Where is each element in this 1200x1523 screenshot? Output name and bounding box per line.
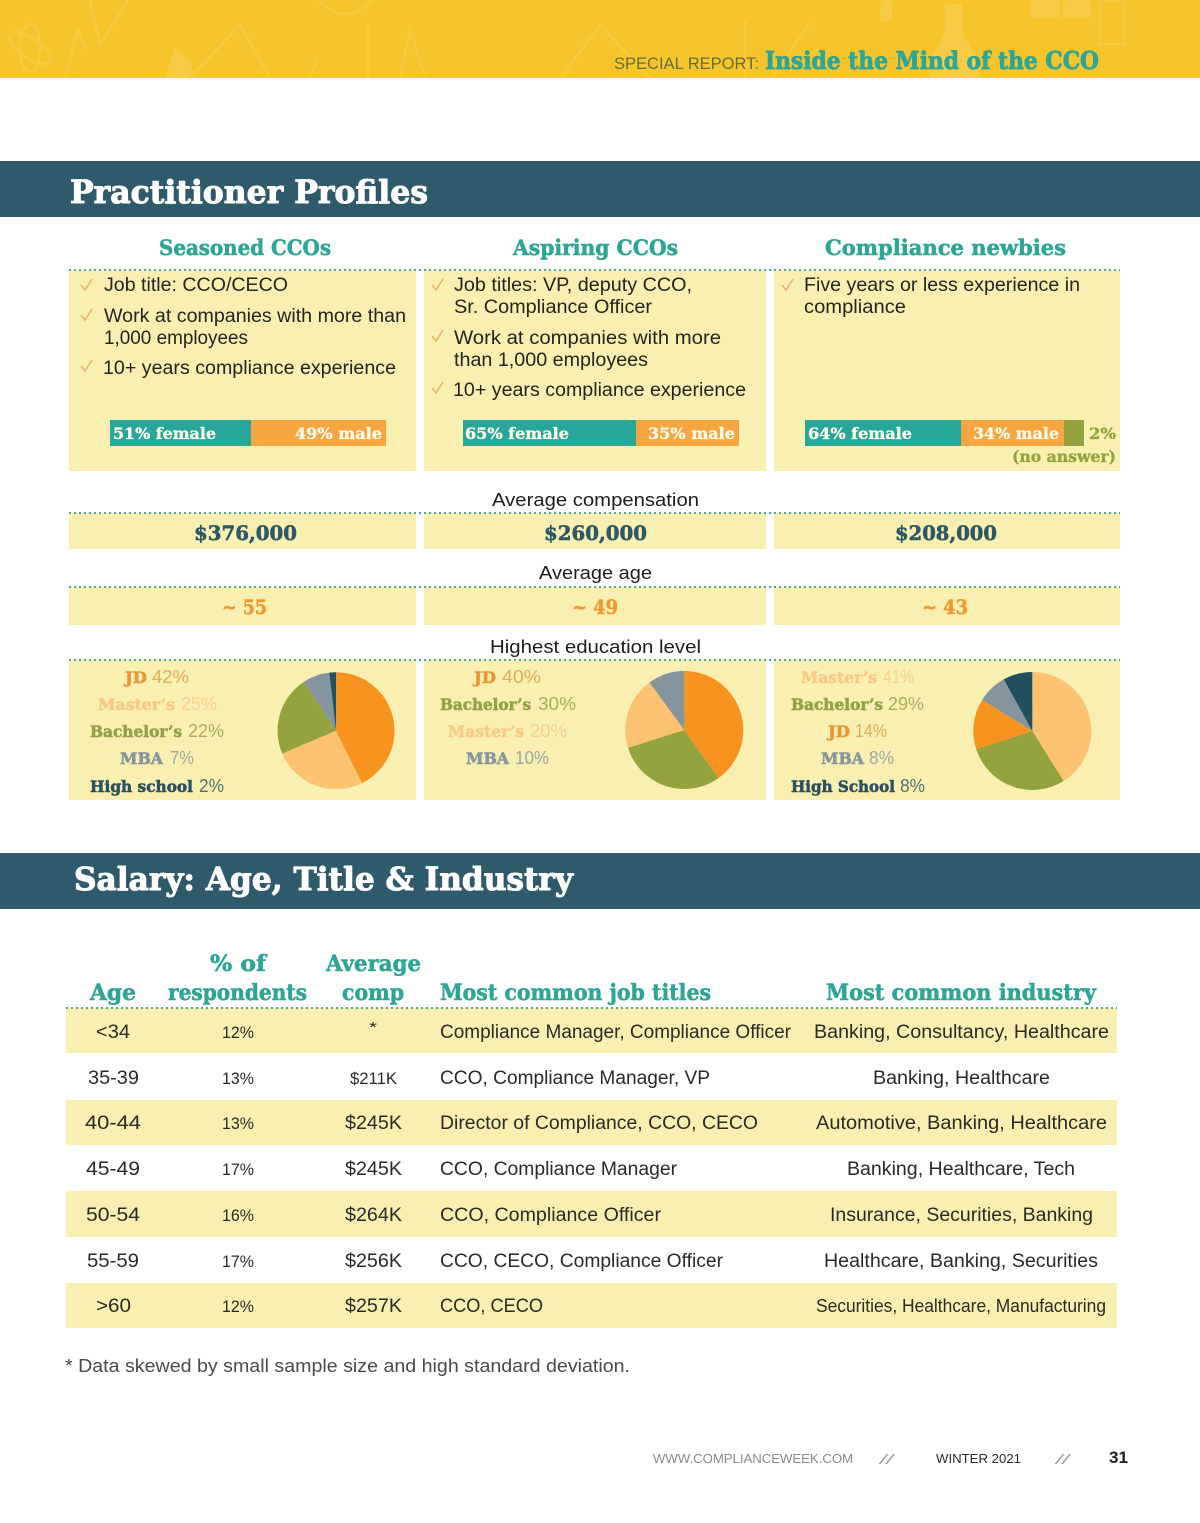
criteria list: Work at companies with more	[454, 328, 721, 349]
average compensation row	[69, 490, 1120, 549]
education legend: Bachelor’s	[90, 722, 182, 741]
row: 55-59: $256K	[345, 1251, 402, 1272]
gender bar: 34% male	[973, 424, 1059, 443]
row: over 60: 12%	[222, 1297, 254, 1316]
row: 55-59: 55-59	[87, 1251, 139, 1272]
education legend	[90, 666, 224, 796]
row: under 34: *	[369, 1019, 377, 1036]
education legend: 8%	[900, 775, 925, 796]
row: 40-44: Director of Compliance, CCO, CECO	[440, 1113, 758, 1134]
education legend: 30%	[538, 693, 576, 714]
row: over 60: Securities, Healthcare, Manufacturing	[816, 1296, 1106, 1316]
row: 50-54: Insurance, Securities, Banking	[830, 1205, 1093, 1226]
icons: check marks	[81, 279, 92, 371]
education legend: Master’s	[801, 668, 877, 687]
row: under 34	[66, 1008, 1117, 1053]
education legend: Bachelor’s	[440, 695, 531, 714]
row: under 34: Banking, Consultancy, Healthcare	[814, 1022, 1109, 1043]
section band: Practitioner Profiles	[0, 161, 1200, 217]
row: 55-59	[87, 1251, 1098, 1272]
footer: //	[1054, 1451, 1073, 1467]
average age row: Average age	[539, 563, 652, 583]
average age row: ~ 43	[922, 595, 968, 619]
column headings: Seasoned CCOs	[159, 235, 331, 260]
education legend: Master’s	[98, 695, 175, 714]
table header: Age	[89, 980, 136, 1006]
gender bar: 35% male	[648, 424, 735, 443]
table header	[89, 951, 1097, 1006]
average compensation row: $376,000	[194, 521, 297, 545]
table header: Most common industry	[826, 980, 1097, 1006]
criteria list: Job titles: VP, deputy CCO,	[454, 275, 692, 296]
section band: Salary	[0, 853, 1200, 909]
row: over 60	[66, 1283, 1117, 1328]
education legend: 22%	[188, 720, 224, 741]
footer	[653, 1448, 1128, 1467]
row: under 34: Compliance Manager, Compliance Officer	[440, 1022, 792, 1043]
row: 45-49: CCO, Compliance Manager	[440, 1159, 678, 1180]
gender bar	[805, 420, 1116, 466]
header title	[614, 46, 1099, 75]
education legend: 42%	[152, 666, 189, 687]
section band: Salary: Salary: Age, Title & Industry	[74, 860, 574, 898]
panel: education, Seasoned CCOs	[69, 660, 416, 800]
row: over 60: CCO, CECO	[440, 1296, 543, 1317]
education legend: MBA	[120, 749, 164, 768]
education legend: 7%	[170, 747, 194, 768]
footer: //	[878, 1451, 897, 1467]
criteria list: Work at companies with more than	[104, 306, 406, 327]
header banner	[0, 0, 1200, 78]
education legend: Master’s	[448, 722, 524, 741]
average compensation row: $260,000	[544, 521, 647, 545]
row: 55-59: CCO, CECO, Compliance Officer	[440, 1251, 724, 1272]
education legend: 10%	[515, 747, 549, 768]
row: 40-44: 13%	[222, 1114, 254, 1133]
education legend: 25%	[181, 693, 217, 714]
pie chart	[973, 672, 1091, 790]
row: 45-49: $245K	[345, 1159, 402, 1180]
row: 35-39	[88, 1068, 1050, 1089]
row: over 60: $257K	[345, 1296, 402, 1317]
header title: Inside the Mind of the CCO	[765, 46, 1099, 75]
gender bar: 2%	[1089, 424, 1116, 443]
criteria list: Five years or less experience in	[804, 275, 1080, 296]
education legend	[440, 666, 576, 768]
education legend	[791, 666, 925, 796]
education legend: JD	[826, 722, 850, 741]
panel: Compliance newbies profile	[774, 270, 1120, 471]
education legend: Bachelor’s	[791, 695, 883, 714]
education legend: High school	[90, 777, 193, 796]
row: 50-54: 50-54	[86, 1205, 140, 1226]
gender bar: (no answer)	[1012, 447, 1116, 466]
criteria list: 10+ years compliance experience	[103, 358, 396, 379]
gender bar: 49% male	[295, 424, 382, 443]
education legend: High School	[791, 777, 895, 796]
header title: SPECIAL REPORT:	[614, 55, 759, 73]
column headings: Aspiring CCOs	[512, 235, 678, 260]
table: salary by age	[66, 951, 1117, 1328]
row: 35-39: 13%	[222, 1069, 254, 1088]
row: 50-54: CCO, Compliance Officer	[440, 1205, 662, 1226]
row: 55-59: 17%	[222, 1252, 254, 1271]
education legend: 40%	[502, 666, 541, 687]
education legend: 41%	[883, 666, 914, 687]
heading: highest education level: Highest education level	[490, 637, 701, 657]
gender bar	[463, 420, 739, 446]
row: 45-49: Banking, Healthcare, Tech	[847, 1159, 1075, 1180]
gender bar: 64% female	[808, 424, 912, 443]
row: under 34: 12%	[222, 1023, 254, 1042]
criteria list	[453, 275, 746, 401]
row: 55-59: Healthcare, Banking, Securities	[824, 1251, 1098, 1272]
table header: Most common job titles	[440, 980, 711, 1006]
row: 40-44: 40-44	[85, 1113, 141, 1134]
table header: respondents	[168, 980, 307, 1006]
row: under 34: <34	[96, 1022, 130, 1043]
pie chart	[625, 671, 743, 789]
row: 45-49: 45-49	[86, 1159, 140, 1180]
table header: Average	[325, 951, 421, 977]
criteria list: Sr. Compliance Officer	[454, 297, 653, 318]
footer: WWW.COMPLIANCEWEEK.COM	[653, 1451, 853, 1466]
row: 50-54: $264K	[345, 1205, 402, 1226]
footer: 31	[1109, 1448, 1128, 1467]
gender bar: 51% female	[113, 424, 216, 443]
column headings	[159, 235, 1066, 260]
education legend: JD	[472, 668, 496, 687]
table header: comp	[342, 980, 404, 1006]
average age row: ~ 49	[572, 595, 618, 619]
average age row: ~ 55	[222, 595, 267, 619]
education legend: MBA	[821, 749, 865, 768]
panel: education, Aspiring CCOs	[424, 660, 766, 800]
row: 40-44	[66, 1100, 1117, 1145]
row: 50-54	[66, 1191, 1117, 1237]
panel: Seasoned CCOs profile	[69, 270, 416, 471]
criteria list	[103, 275, 406, 379]
icons: check marks	[432, 279, 443, 393]
row: 40-44: Automotive, Banking, Healthcare	[816, 1113, 1107, 1134]
criteria list	[804, 275, 1080, 318]
criteria list: than 1,000 employees	[454, 350, 648, 371]
row: 45-49	[86, 1159, 1075, 1180]
education legend: 20%	[530, 720, 567, 741]
panel: Aspiring CCOs profile	[424, 270, 766, 471]
row: over 60: >60	[96, 1296, 131, 1317]
gender bar: 65% female	[465, 424, 569, 443]
education legend: 2%	[199, 775, 224, 796]
footnote: * Data skewed by small sample size and high standard deviation.	[65, 1355, 630, 1376]
education legend: 14%	[855, 720, 887, 741]
education legend: 8%	[869, 747, 894, 768]
education legend: MBA	[466, 749, 510, 768]
row: 50-54: 16%	[222, 1206, 254, 1225]
icon: check mark	[782, 279, 793, 290]
pie chart	[278, 672, 394, 789]
average compensation row: Average compensation	[492, 490, 699, 510]
row: 35-39: 35-39	[88, 1068, 139, 1089]
table header: % of	[210, 951, 268, 977]
education legend: JD	[123, 668, 147, 687]
section band: Practitioner Profiles: Practitioner Profiles	[70, 173, 428, 211]
row: 35-39: CCO, Compliance Manager, VP	[440, 1068, 710, 1089]
criteria list: 10+ years compliance experience	[453, 380, 746, 401]
row: 35-39: $211K	[350, 1069, 398, 1088]
row: 45-49: 17%	[222, 1160, 254, 1179]
column headings: Compliance newbies	[825, 235, 1066, 260]
footer: WINTER 2021	[936, 1451, 1021, 1466]
average age row	[69, 563, 1120, 625]
panel: education, Compliance newbies	[774, 660, 1120, 800]
average compensation row: $208,000	[895, 521, 997, 545]
row: 35-39: Banking, Healthcare	[873, 1068, 1050, 1089]
row: 40-44: $245K	[345, 1113, 402, 1134]
gender bar	[110, 420, 386, 446]
education legend: 29%	[888, 693, 924, 714]
criteria list: compliance	[804, 297, 906, 318]
criteria list: Job title: CCO/CECO	[104, 275, 288, 296]
criteria list: 1,000 employees	[104, 328, 248, 349]
